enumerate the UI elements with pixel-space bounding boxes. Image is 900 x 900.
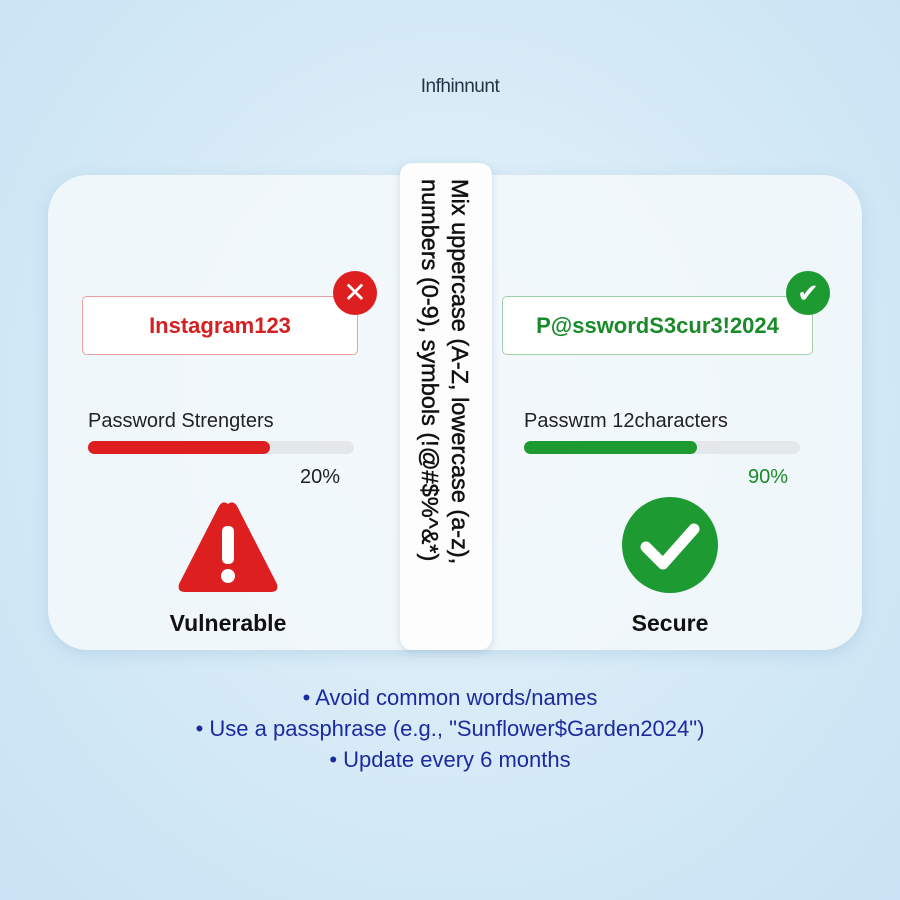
weak strength meter: Password Strengters — [88, 410, 274, 432]
label: secure: Secure — [632, 610, 708, 636]
icon: green check — [786, 271, 830, 315]
vertical tip strip — [400, 163, 492, 650]
main panel — [48, 175, 862, 650]
weak strength meter: 20% — [300, 466, 340, 488]
bullet tips — [196, 685, 704, 772]
input: weak password: Instagram123 — [149, 313, 291, 338]
strong strength meter — [524, 410, 800, 488]
input: weak password — [82, 296, 358, 355]
weak strength meter — [88, 410, 354, 488]
strong strength meter: 90% — [748, 466, 788, 488]
icon: red x — [333, 271, 377, 315]
icon: warning triangle — [178, 502, 278, 592]
strong strength meter: Passwɪm 12characters — [524, 410, 728, 432]
bullet tips: • Update every 6 months — [329, 747, 571, 772]
vertical tip strip: Mix uppercase (A-Z, lowercase (a-z), numbers (0-9), symbols (!@#$%^&*) — [417, 179, 473, 564]
title: Infhinnunt — [421, 76, 499, 97]
input: strong password — [502, 296, 813, 355]
icon: green check: ✔ — [797, 278, 819, 308]
input: strong password: P@sswordS3cur3!2024 — [536, 313, 779, 338]
icon: secure check — [622, 497, 718, 593]
bullet tips: • Use a passphrase (e.g., "Sunflower$Garden2024") — [196, 716, 704, 741]
icon: red x: ✕ — [343, 277, 367, 308]
bullet tips: • Avoid common words/names — [303, 685, 597, 710]
label: vulnerable: Vulnerable — [170, 610, 286, 636]
